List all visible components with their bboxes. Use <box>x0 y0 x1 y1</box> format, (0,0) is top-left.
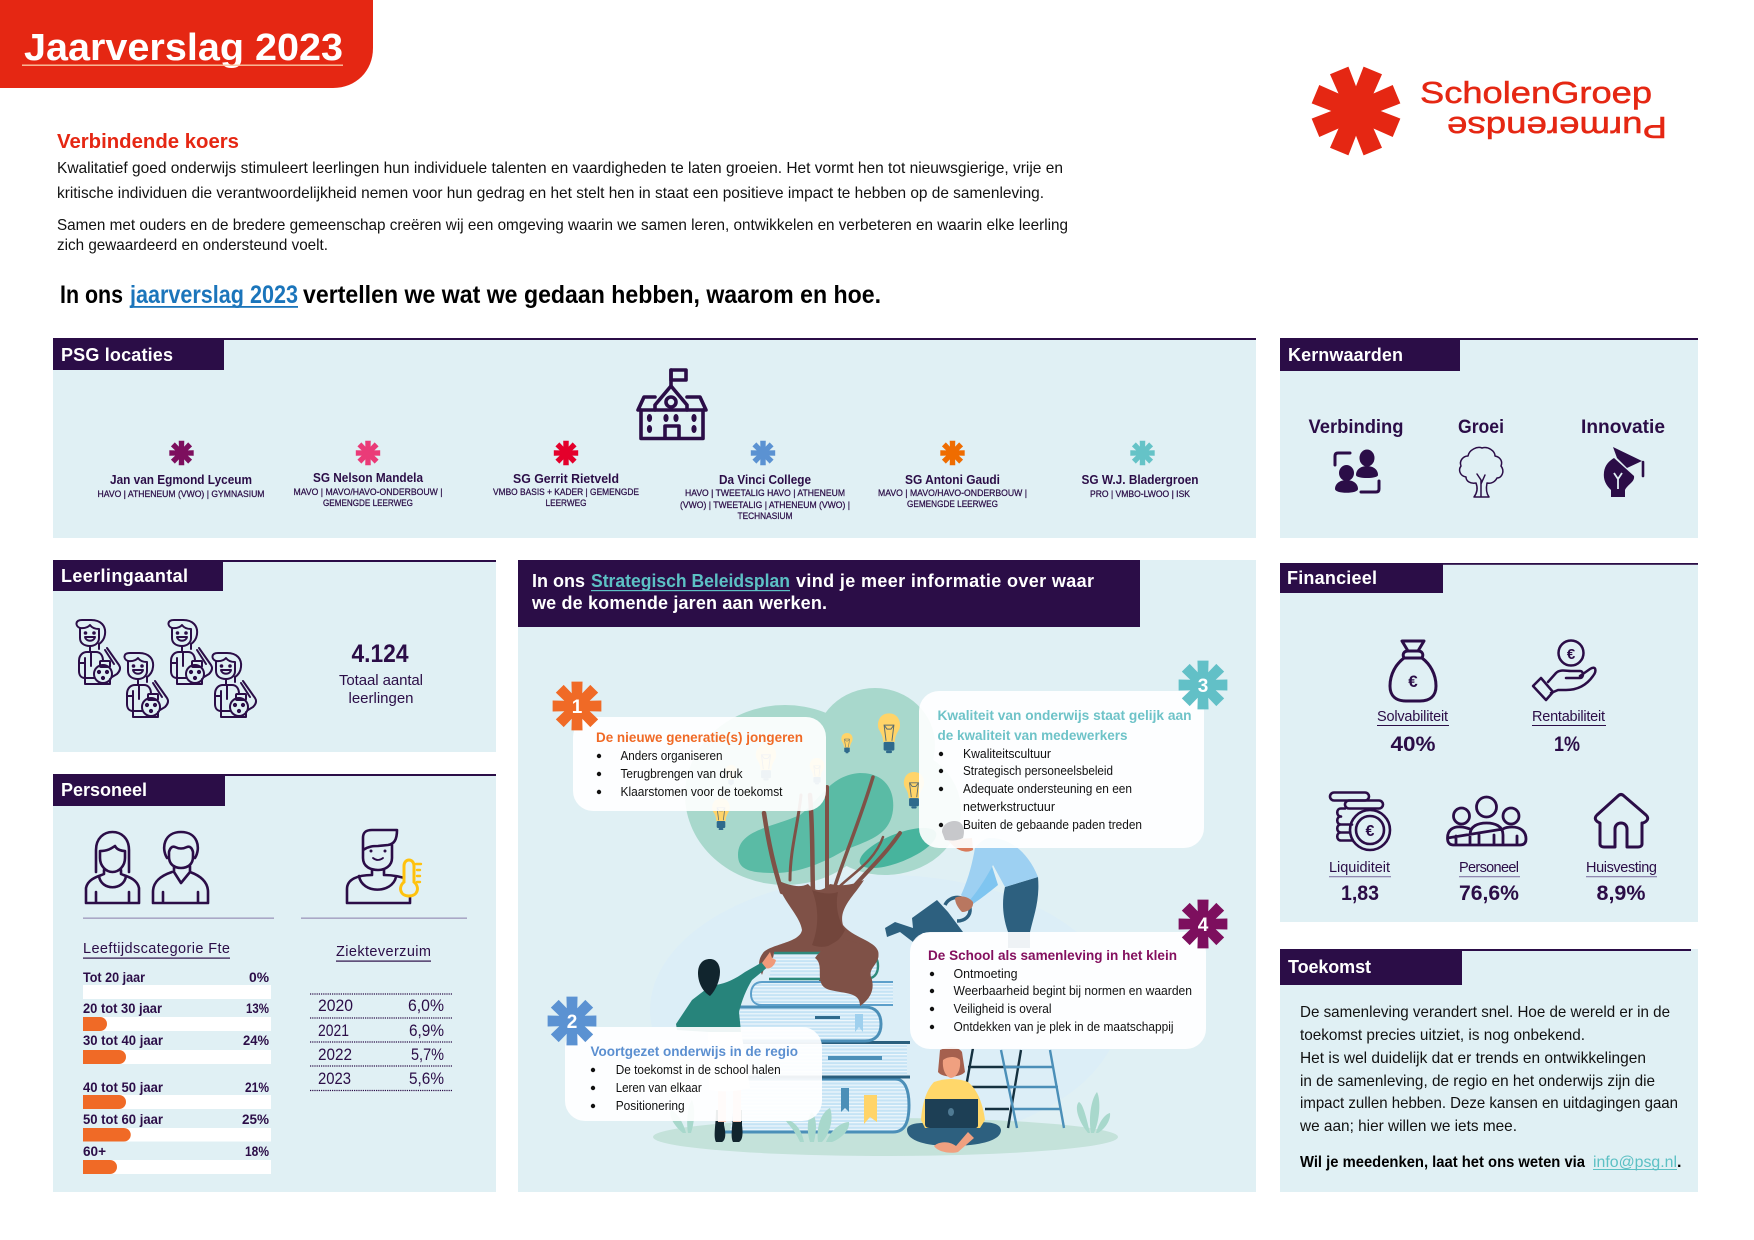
heading banner: In ons <box>532 571 585 591</box>
callout 3: Strategisch personeelsbeleid <box>963 763 1113 778</box>
icon: woman <box>86 832 139 903</box>
location: SG Gerrit Rietveld: LEERWEG <box>546 498 586 509</box>
heading: Toekomst: Toekomst <box>1288 957 1371 977</box>
metric: Solvabiliteit: 40% <box>1390 733 1436 756</box>
location: SG W.J. Bladergroen: SG W.J. Bladergroen <box>1082 473 1198 487</box>
callout 1: Anders organiseren <box>620 748 722 763</box>
icon: students <box>76 620 256 717</box>
panel: Financieel <box>1280 563 1698 922</box>
gardener with watering can <box>885 821 1038 948</box>
location: SG Nelson Mandela: SG Nelson Mandela <box>313 471 424 485</box>
value: Innovatie: Innovatie <box>1581 417 1665 438</box>
location: SG W.J. Bladergroen <box>1082 441 1198 500</box>
heading: Leerlingaantal: Leerlingaantal <box>61 566 188 586</box>
callout 2: Positionering <box>616 1098 685 1113</box>
row: 30 tot 40 jaar: 24% <box>243 1032 270 1048</box>
stat: total students: Totaal aantal <box>339 672 423 689</box>
panel: Kernwaarden <box>1280 338 1698 538</box>
heading: Kernwaarden <box>1280 338 1460 371</box>
row: 50 tot 60 jaar: 50 tot 60 jaar <box>83 1111 164 1127</box>
illustration: tree on books <box>650 688 1120 1156</box>
sick leave table: Ziekteverzuim <box>336 944 431 960</box>
metric: Personeel <box>1448 797 1526 905</box>
location: Da Vinci College: (VWO) | TWEETALIG | ATHENEUM (VWO) | <box>680 500 850 511</box>
badge 2: 2 <box>567 1012 577 1033</box>
callout 3 <box>919 661 1227 848</box>
age category chart: Leeftijdscategorie Fte <box>83 941 230 957</box>
row: 50 tot 60 jaar: 25% <box>242 1111 270 1127</box>
location: Da Vinci College: Da Vinci College <box>719 473 811 487</box>
value: Groei: Groei <box>1458 417 1504 438</box>
metric: Solvabiliteit: € <box>1408 672 1418 691</box>
badge 2 <box>548 997 596 1045</box>
callout 2: Leren van elkaar <box>616 1080 702 1095</box>
sick leave table: 5,7% <box>411 1046 444 1064</box>
callout 1: Klaarstomen voor de toekomst <box>620 784 783 799</box>
metric: Rentabiliteit <box>1532 640 1606 756</box>
call to action: info@psg.nl <box>1593 1154 1677 1171</box>
location: Da Vinci College: HAVO | TWEETALIG HAVO | ATHENEUM <box>685 488 845 499</box>
location: Jan van Egmond Lyceum: HAVO | ATHENEUM (VWO) | GYMNASIUM <box>98 489 265 500</box>
callout 3: netwerkstructuur <box>963 799 1056 814</box>
callout 4: Veiligheid is overal <box>954 1001 1052 1016</box>
heading: PSG locaties: PSG locaties <box>61 345 173 365</box>
icon: sick person with thermometer <box>347 830 421 903</box>
row: 50 tot 60 jaar <box>83 1111 271 1142</box>
heading banner: vind je meer informatie over waar <box>796 571 1094 591</box>
sick leave table: 5,6% <box>409 1070 444 1088</box>
badge 4: 4 <box>1198 915 1209 936</box>
location: SG Antoni Gaudi: SG Antoni Gaudi <box>905 473 1000 487</box>
intro text: kritische individuen die verantwoordelijkheid nemen voor hun gedrag en het stelt hen in staat een positieve impact te hebben op de samenleving. <box>57 185 1044 202</box>
row: 30 tot 40 jaar: 30 tot 40 jaar <box>83 1032 164 1048</box>
row: 60+ <box>83 1143 271 1174</box>
row: 60+: 18% <box>245 1143 269 1159</box>
ground <box>653 1118 1118 1156</box>
metric: Huisvesting: Huisvesting <box>1586 860 1657 876</box>
heading banner: Strategisch Beleidsplan <box>591 571 790 591</box>
icon: man <box>153 832 208 903</box>
row: Tot 20 jaar <box>83 969 271 999</box>
callout 3: de kwaliteit van medewerkers <box>938 727 1128 743</box>
text: outlook: De samenleving verandert snel. Hoe de wereld er in de <box>1300 1004 1670 1021</box>
callout 3: Buiten de gebaande paden treden <box>963 817 1142 832</box>
standing woman <box>676 952 776 1142</box>
location: SG Antoni Gaudi: MAVO | MAVO/HAVO-ONDERBOUW | <box>878 488 1027 499</box>
text: outlook: Het is wel duidelijk dat er trends en ontwikkelingen <box>1300 1050 1646 1067</box>
row: 40 tot 50 jaar <box>83 1079 271 1109</box>
stat: total students: 4.124 <box>352 640 409 668</box>
sick leave table: 6,0% <box>408 997 444 1015</box>
panel: PSG locaties <box>53 338 1256 538</box>
row: 40 tot 50 jaar: 40 tot 50 jaar <box>83 1079 164 1095</box>
callout 1 <box>553 682 826 811</box>
callout 4 <box>910 900 1227 1049</box>
sick leave table: 2021 <box>318 1022 349 1040</box>
heading: Personeel <box>53 774 225 806</box>
light bulbs <box>712 713 924 830</box>
sick leave table: 2023 <box>318 1070 351 1088</box>
row: 20 tot 30 jaar <box>83 1000 271 1031</box>
location: SG Antoni Gaudi <box>878 441 1027 510</box>
location: Jan van Egmond Lyceum: Jan van Egmond Lyceum <box>110 473 252 487</box>
row: Tot 20 jaar: Tot 20 jaar <box>83 969 145 985</box>
location: SG W.J. Bladergroen: PRO | VMBO-LWOO | ISK <box>1090 489 1191 500</box>
callout 1: De nieuwe generatie(s) jongeren <box>596 729 803 745</box>
books stack <box>722 953 910 1132</box>
callout 3: Kwaliteit van onderwijs staat gelijk aan <box>938 707 1192 723</box>
badge 4 <box>1179 900 1227 948</box>
logo ScholenGroep Purmerendse <box>1299 54 1667 168</box>
intro heading: Verbindende koers <box>57 131 239 153</box>
logo ScholenGroep Purmerendse: Purmerendse <box>1447 110 1667 145</box>
location: SG Gerrit Rietveld: VMBO BASIS + KADER | GEMENGDE <box>493 487 639 498</box>
headline with link <box>60 281 881 309</box>
callout 4: Weerbaarheid begint bij normen en waarden <box>954 983 1192 998</box>
location: Da Vinci College <box>680 441 850 522</box>
headline with link: In ons <box>60 281 123 309</box>
value: Verbinding <box>1308 417 1404 493</box>
root over books <box>815 938 878 1006</box>
heading: PSG locaties <box>53 338 224 370</box>
metric: Rentabiliteit: 1% <box>1554 733 1580 756</box>
seated woman with laptop <box>907 1047 1001 1153</box>
metric: Solvabiliteit <box>1377 641 1449 756</box>
location: SG Gerrit Rietveld: SG Gerrit Rietveld <box>513 472 619 486</box>
badge 1 <box>553 682 601 730</box>
text: outlook: in de samenleving, de regio en het onderwijs zijn die <box>1300 1073 1655 1090</box>
callout 2 <box>548 997 822 1121</box>
call to action: . <box>1677 1154 1681 1171</box>
location: SG Nelson Mandela: GEMENGDE LEERWEG <box>323 498 413 509</box>
metric: Liquiditeit <box>1329 792 1391 905</box>
row: 20 tot 30 jaar: 20 tot 30 jaar <box>83 1000 163 1016</box>
panel: Personeel <box>53 774 496 1192</box>
heading banner <box>518 560 1140 627</box>
headline with link: vertellen we wat we gedaan hebben, waarom en hoe. <box>303 281 881 309</box>
callout 2: De toekomst in de school halen <box>616 1062 781 1077</box>
text: outlook: we aan; hier willen we iets mee. <box>1299 1118 1517 1135</box>
tree trunk and roots <box>759 777 900 1006</box>
age category chart <box>83 941 271 1174</box>
stat: total students <box>339 640 423 707</box>
sick leave table: 2022 <box>318 1046 352 1064</box>
text: outlook: toekomst precies uitziet, is nog onbekend. <box>1300 1027 1585 1044</box>
panel: Toekomst <box>1280 949 1698 1192</box>
location: SG Nelson Mandela <box>294 441 442 509</box>
row: 60+: 60+ <box>83 1143 106 1159</box>
callout 4: Ontdekken van je plek in de maatschappij <box>954 1019 1174 1034</box>
callout 3: Kwaliteitscultuur <box>963 746 1052 761</box>
row: 40 tot 50 jaar: 21% <box>245 1079 269 1095</box>
heading: Financieel: Financieel <box>1287 568 1377 588</box>
metric: Liquiditeit: Liquiditeit <box>1329 860 1390 876</box>
location: SG Nelson Mandela: MAVO | MAVO/HAVO-ONDERBOUW | <box>294 487 442 498</box>
metric: Huisvesting <box>1586 794 1657 905</box>
location: Jan van Egmond Lyceum <box>98 441 265 500</box>
logo ScholenGroep Purmerendse: ScholenGroep <box>1420 75 1652 110</box>
icon: school building <box>638 370 706 438</box>
metric: Rentabiliteit: € <box>1567 646 1576 663</box>
location: SG Antoni Gaudi: GEMENGDE LEERWEG <box>907 499 998 510</box>
tree foliage <box>685 688 961 885</box>
value: Innovatie <box>1581 417 1665 497</box>
plants <box>670 1092 1110 1142</box>
callout 4: De School als samenleving in het klein <box>928 947 1177 963</box>
ladder <box>966 1048 1064 1128</box>
heading: Financieel <box>1280 563 1443 593</box>
text: outlook <box>1299 1004 1678 1135</box>
sick leave table: 6,9% <box>409 1022 444 1040</box>
intro text: zich gewaardeerd en ondersteund voelt. <box>57 237 328 254</box>
metric: Personeel: 76,6% <box>1459 882 1519 905</box>
intro text: Kwalitatief goed onderwijs stimuleert leerlingen hun individuele talenten en vaardigheden te laten groeien. Het vormt hen tot nieuwsgierige, vrije en <box>57 160 1063 177</box>
heading: Kernwaarden: Kernwaarden <box>1288 345 1403 365</box>
badge 3 <box>1179 661 1227 709</box>
intro text: Samen met ouders en de bredere gemeenschap creëren wij een omgeving waarin we samen leren, ontwikkelen en verbeteren en waarin elke leerling <box>57 217 1068 234</box>
badge 1: 1 <box>572 697 583 718</box>
headline with link: jaarverslag 2023 <box>129 281 298 309</box>
location: Da Vinci College: TECHNASIUM <box>738 511 793 522</box>
value: Verbinding: Verbinding <box>1308 417 1404 438</box>
metric: Liquiditeit: € <box>1366 823 1375 840</box>
backdrop <box>650 875 1120 1145</box>
sick leave table <box>310 944 452 1090</box>
value: Groei <box>1458 417 1504 497</box>
text: outlook: impact zullen hebben. Deze kansen en uitdagingen gaan <box>1300 1095 1678 1112</box>
stat: total students: leerlingen <box>348 690 414 707</box>
row: 30 tot 40 jaar <box>83 1032 271 1064</box>
heading: Leerlingaantal <box>53 560 223 591</box>
callout 3: Adequate ondersteuning en een <box>963 781 1132 796</box>
heading: Personeel: Personeel <box>61 780 147 800</box>
metric: Personeel: Personeel <box>1459 860 1519 876</box>
title: Jaarverslag 2023 <box>24 27 343 69</box>
intro text <box>57 160 1068 254</box>
callout 4: Ontmoeting <box>954 966 1018 981</box>
header banner <box>0 0 373 88</box>
panel: Leerlingaantal <box>53 560 496 752</box>
location: SG Gerrit Rietveld <box>493 441 639 509</box>
callout 1: Terugbrengen van druk <box>620 766 743 781</box>
callout 2: Voortgezet onderwijs in de regio <box>590 1043 798 1059</box>
metric: Solvabiliteit: Solvabiliteit <box>1377 709 1448 725</box>
row: Tot 20 jaar: 0% <box>249 969 270 985</box>
call to action: Wil je meedenken, laat het ons weten via <box>1300 1154 1585 1171</box>
heading banner: we de komende jaren aan werken. <box>531 593 827 613</box>
badge 3: 3 <box>1198 676 1208 697</box>
panel: Strategisch Beleidsplan <box>518 560 1256 1192</box>
metric: Huisvesting: 8,9% <box>1596 882 1646 905</box>
sick leave table: 2020 <box>318 997 353 1015</box>
heading: Toekomst <box>1280 949 1462 985</box>
metric: Liquiditeit: 1,83 <box>1341 882 1379 905</box>
metric: Rentabiliteit: Rentabiliteit <box>1532 709 1605 725</box>
row: 20 tot 30 jaar: 13% <box>246 1000 269 1016</box>
